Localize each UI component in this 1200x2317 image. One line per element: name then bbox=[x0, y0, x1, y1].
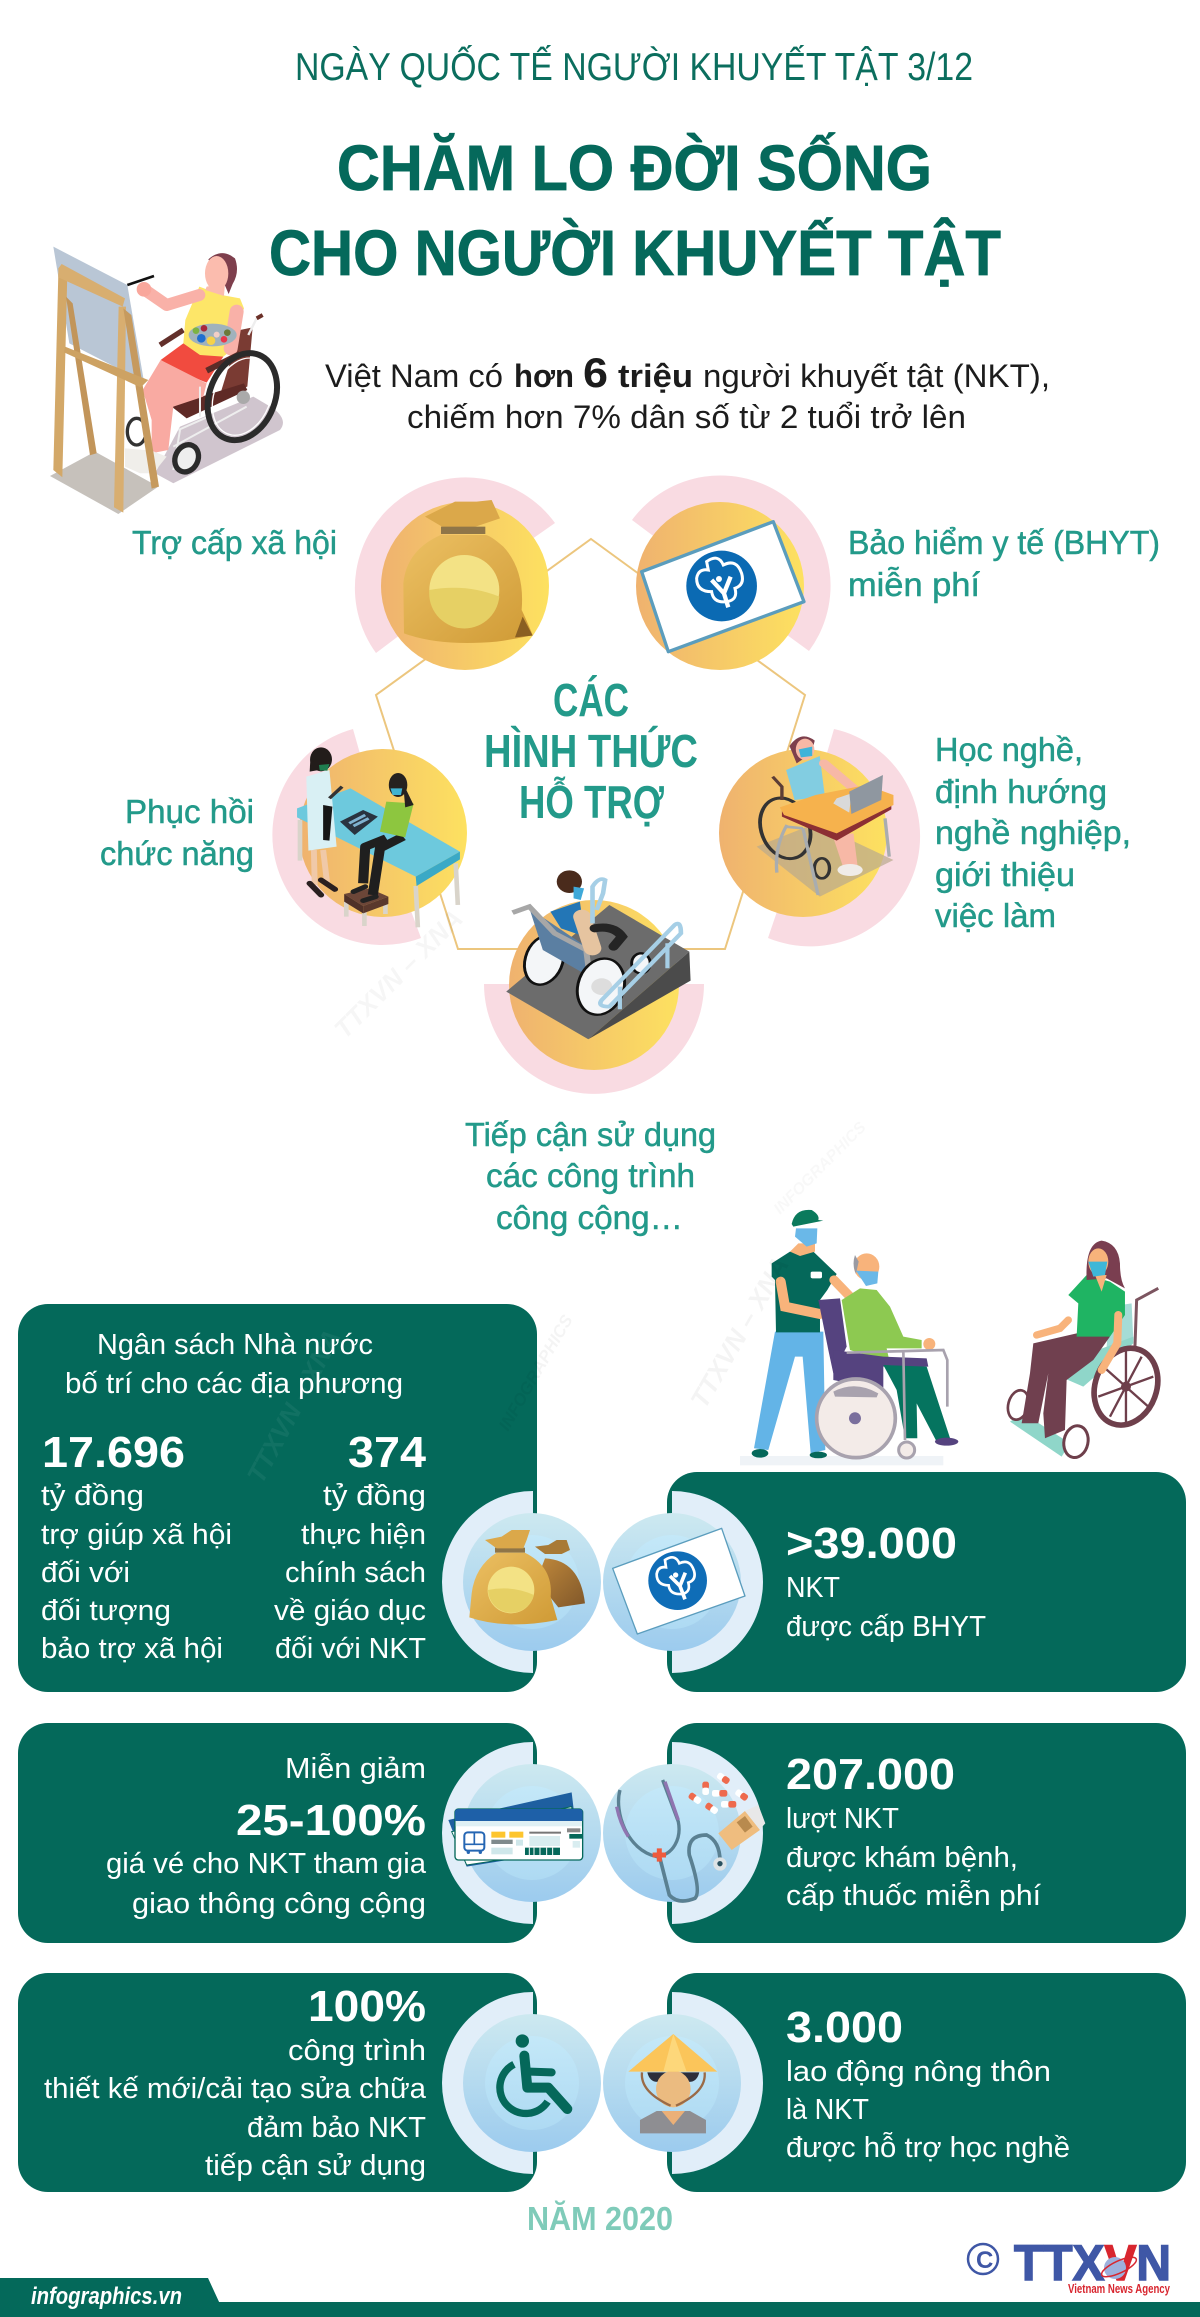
label: health insurance: miễn phí bbox=[848, 566, 980, 603]
intro text: triệu bbox=[618, 358, 693, 394]
label: rehabilitation: Phục hồi bbox=[125, 793, 254, 830]
stat: 17.696: bảo trợ xã hội bbox=[41, 1633, 223, 1665]
icon: money bags badge bbox=[442, 1491, 601, 1673]
text: budget heading: bố trí cho các địa phương bbox=[65, 1368, 403, 1400]
illustration: caregiver and elder, woman in wheelchair bbox=[740, 1210, 1168, 1465]
illustration: doctor and patient bbox=[297, 747, 460, 927]
watermarks: INFOGRAPHICS bbox=[771, 1119, 870, 1218]
label: health insurance bbox=[848, 524, 1160, 603]
text: budget heading: Ngân sách Nhà nước bbox=[97, 1329, 373, 1361]
footer band bbox=[0, 2278, 1200, 2317]
stat: 374: 374 bbox=[348, 1428, 427, 1477]
stat: 17.696: 17.696 bbox=[42, 1428, 185, 1477]
label: center heading bbox=[484, 674, 698, 828]
icon: transport tickets badge bbox=[442, 1742, 601, 1924]
label: rehabilitation: chức năng bbox=[100, 835, 254, 872]
footer site name: infographics.vn bbox=[31, 2283, 182, 2310]
stat: 207.000: được khám bệnh, bbox=[786, 1842, 1018, 1874]
label: center heading: CÁC bbox=[553, 674, 629, 726]
stat: 100%: thiết kế mới/cải tạo sửa chữa bbox=[44, 2073, 427, 2105]
label: public works access: Tiếp cận sử dụng bbox=[465, 1116, 716, 1153]
illustration: painter in wheelchair bbox=[50, 247, 289, 514]
intro text: Việt Nam có bbox=[325, 358, 503, 394]
title bbox=[269, 132, 1001, 289]
logo: TTXVN: C bbox=[976, 2247, 993, 2274]
icon: insurance card bbox=[642, 522, 804, 652]
stat: 25-100%: giao thông công cộng bbox=[132, 1888, 426, 1920]
stat: 207.000: 207.000 bbox=[786, 1750, 955, 1799]
icon: stethoscope and pills badge bbox=[603, 1742, 765, 1924]
stat: 25-100%: giá vé cho NKT tham gia bbox=[106, 1848, 427, 1880]
label: public works access bbox=[465, 1116, 716, 1236]
title: CHĂM LO ĐỜI SỐNG bbox=[337, 132, 932, 204]
circle: vocational training bbox=[719, 729, 920, 946]
panel: transport discount bbox=[18, 1723, 537, 1943]
icon: money bag bbox=[403, 500, 533, 643]
illustration: person at desk bbox=[753, 736, 893, 897]
label: public works access: công cộng… bbox=[496, 1199, 683, 1236]
label: social allowance: Trợ cấp xã hội bbox=[132, 524, 337, 561]
stat: 39.000: >39.000 bbox=[786, 1519, 957, 1568]
label: vocational training: giới thiệu bbox=[935, 856, 1075, 893]
label: vocational training: nghề nghiệp, bbox=[935, 814, 1131, 851]
stat: 3.000: là NKT bbox=[786, 2094, 869, 2126]
label: vocational training bbox=[935, 731, 1131, 934]
watermarks: TTXVN – XNA bbox=[241, 1324, 347, 1488]
label: center heading: HÌNH THỨC bbox=[484, 725, 698, 777]
stat: 374: về giáo dục bbox=[274, 1595, 426, 1627]
stat: 39.000: NKT bbox=[786, 1572, 840, 1604]
stat: 3.000: 3.000 bbox=[786, 2003, 903, 2052]
icon: wheelchair symbol badge bbox=[442, 1992, 601, 2174]
label: vocational training: định hướng bbox=[935, 773, 1107, 810]
year note: NĂM 2020 bbox=[527, 2200, 673, 2237]
watermarks bbox=[241, 904, 870, 1488]
stat: 17.696: đối với bbox=[41, 1557, 130, 1589]
icon: insurance card badge bbox=[603, 1491, 763, 1673]
stat: 17.696 bbox=[41, 1428, 232, 1665]
illustration: wheelchair user on ramp bbox=[506, 870, 691, 1039]
stat: 207.000 bbox=[786, 1750, 1041, 1912]
stat: 374: đối với NKT bbox=[275, 1633, 426, 1665]
watermarks: TTXVN – XNA bbox=[684, 1252, 795, 1413]
stat: 100%: 100% bbox=[308, 1982, 426, 2031]
label: vocational training: Học nghề, bbox=[935, 731, 1083, 768]
circle: health insurance bbox=[632, 475, 831, 670]
stat: 25-100%: Miễn giảm bbox=[285, 1752, 426, 1785]
title: CHO NGƯỜI KHUYẾT TẬT bbox=[269, 216, 1001, 289]
stat: 39.000: được cấp BHYT bbox=[786, 1611, 986, 1643]
panel: insurance stat bbox=[667, 1472, 1186, 1692]
icon: farmer with conical hat badge bbox=[603, 1992, 763, 2174]
panel: medical stat bbox=[667, 1723, 1186, 1943]
circle: social allowance bbox=[355, 477, 555, 670]
label: public works access: các công trình bbox=[486, 1157, 695, 1194]
label: center heading: HỖ TRỢ bbox=[519, 776, 665, 828]
intro text: chiếm hơn 7% dân số từ 2 tuổi trở lên bbox=[407, 399, 966, 435]
intro text: người khuyết tật (NKT), bbox=[703, 358, 1050, 394]
intro text: hơn bbox=[514, 358, 574, 394]
stat: 17.696: đối tượng bbox=[41, 1595, 171, 1627]
panel: state budget bbox=[18, 1304, 537, 1692]
stat: 207.000: lượt NKT bbox=[786, 1803, 899, 1835]
label: rehabilitation bbox=[100, 793, 254, 872]
subtitle: NGÀY QUỐC TẾ NGƯỜI KHUYẾT TẬT 3/12 bbox=[295, 44, 973, 89]
logo: TTXVN: TTXVN bbox=[1014, 2235, 1171, 2291]
stat: 100%: tiếp cận sử dụng bbox=[205, 2150, 426, 2182]
intro text bbox=[325, 349, 1050, 435]
stat: 374: thực hiện bbox=[301, 1519, 426, 1551]
stat: 3.000 bbox=[786, 2003, 1070, 2164]
stat: 374: tỷ đồng bbox=[323, 1480, 426, 1512]
stat: 17.696: tỷ đồng bbox=[41, 1480, 144, 1512]
watermarks: INFOGRAPHICS bbox=[495, 1311, 577, 1434]
label: health insurance: Bảo hiểm y tế (BHYT) bbox=[848, 524, 1160, 561]
stat: 207.000: cấp thuốc miễn phí bbox=[786, 1879, 1041, 1912]
stat: 100%: đảm bảo NKT bbox=[247, 2112, 426, 2144]
panel: rural workers bbox=[667, 1973, 1186, 2192]
text: budget heading bbox=[65, 1329, 403, 1400]
stat: 25-100%: 25-100% bbox=[236, 1796, 426, 1845]
stat: 25-100% bbox=[106, 1752, 427, 1920]
stat: 39.000 bbox=[786, 1519, 986, 1643]
circle: accessibility ramp bbox=[484, 870, 704, 1094]
stat: 374 bbox=[274, 1428, 427, 1665]
stat: 100% bbox=[44, 1982, 427, 2182]
watermarks: TTXVN – XNA bbox=[328, 904, 469, 1044]
stat: 3.000: lao động nông thôn bbox=[786, 2056, 1051, 2088]
stat: 374: chính sách bbox=[285, 1557, 426, 1589]
stat: 3.000: được hỗ trợ học nghề bbox=[786, 2131, 1070, 2164]
intro text: 6 bbox=[583, 349, 608, 396]
panel: accessible buildings bbox=[18, 1973, 537, 2192]
stat: 17.696: trợ giúp xã hội bbox=[41, 1519, 232, 1551]
circle: rehabilitation bbox=[272, 729, 467, 945]
stat: 100%: công trình bbox=[288, 2035, 426, 2067]
connector pentagon bbox=[376, 539, 805, 949]
label: vocational training: việc làm bbox=[935, 897, 1056, 934]
